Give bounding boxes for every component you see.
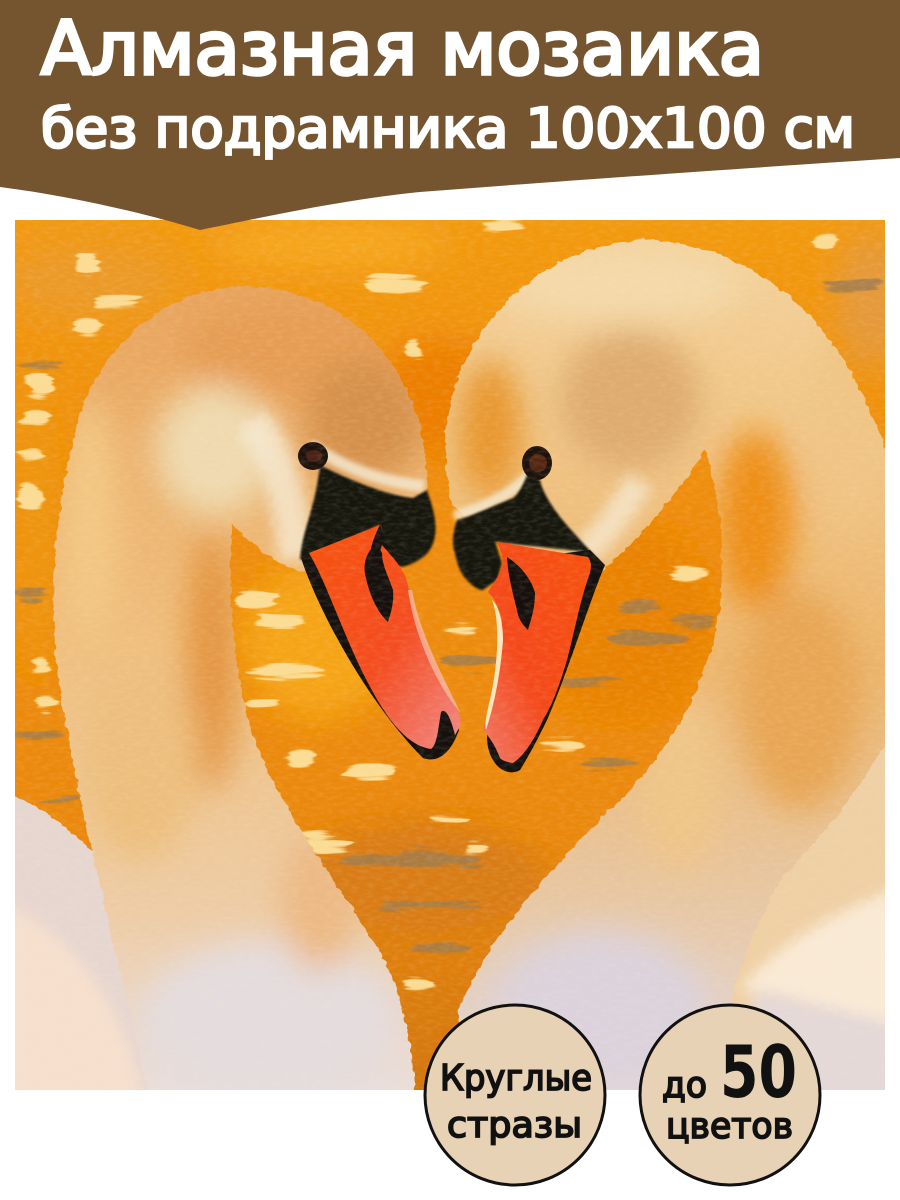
left swan beak bbox=[301, 525, 461, 759]
painting: two swans forming a heart bbox=[0, 200, 900, 1120]
right swan cream fringe bbox=[454, 475, 530, 516]
brush grain overlay bbox=[15, 220, 885, 1090]
left swan eye bbox=[298, 442, 328, 470]
water background bbox=[0, 200, 900, 1110]
badge: round rhinestones: стразы bbox=[447, 1105, 582, 1146]
left swan bbox=[52, 285, 460, 1090]
right swan eye bbox=[522, 446, 552, 480]
header banner bbox=[0, 0, 900, 230]
left swan face mask bbox=[300, 465, 436, 567]
right swan bbox=[440, 230, 900, 1110]
right swan face mask bbox=[453, 475, 605, 590]
badge: round rhinestones bbox=[425, 1005, 605, 1185]
left nostril bbox=[364, 543, 393, 622]
badge: round rhinestones: Круглые bbox=[440, 1058, 592, 1099]
right swan body feathers bbox=[730, 746, 885, 1090]
title: Алмазная мозаика bbox=[41, 6, 764, 92]
left swan neck and head bbox=[52, 285, 428, 1090]
subtitle: без подрамника 100х100 см bbox=[41, 97, 855, 160]
right nostril bbox=[507, 557, 535, 630]
right swan neck and head bbox=[440, 230, 900, 1110]
badge: up to 50 colours bbox=[640, 1005, 820, 1185]
badge: up to 50 colours: 50 bbox=[720, 1030, 797, 1114]
left swan cream fringe bbox=[310, 445, 424, 486]
badge: up to 50 colours: цветов bbox=[666, 1106, 793, 1147]
badge: up to 50 colours: до bbox=[662, 1065, 707, 1106]
left swan body feathers bbox=[15, 796, 148, 1090]
right swan beak bbox=[483, 542, 605, 772]
